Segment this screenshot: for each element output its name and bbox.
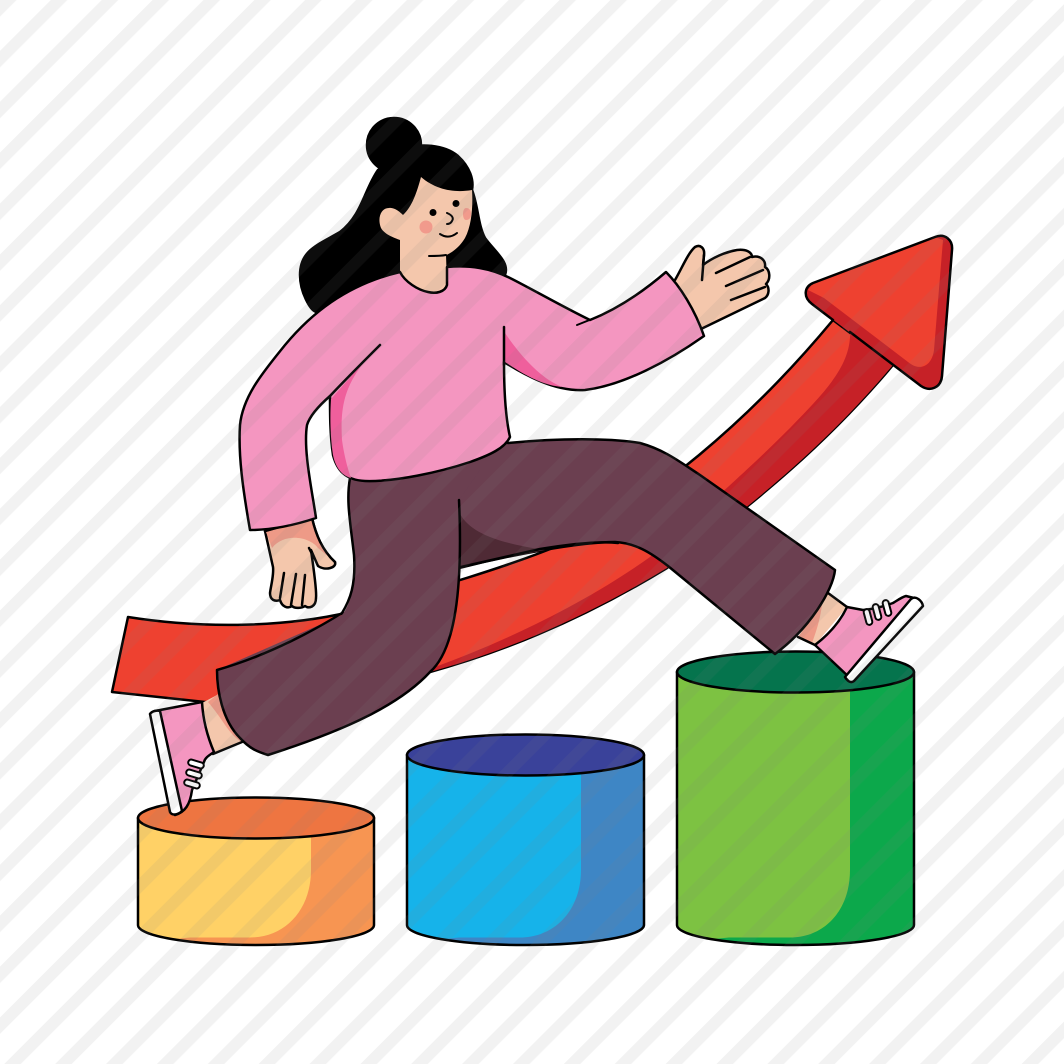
chin line	[429, 255, 446, 256]
right shoe and ankle	[798, 593, 923, 682]
arrow: rising red arrow	[112, 236, 952, 703]
trousers	[217, 439, 835, 755]
back leg	[217, 470, 480, 755]
woman	[150, 118, 923, 815]
sleeve shadows	[330, 357, 368, 478]
front leg	[430, 439, 835, 654]
lower hand	[265, 518, 335, 608]
sweater	[240, 266, 704, 530]
left shoe and ankle	[150, 694, 245, 815]
arrow head	[806, 236, 952, 389]
cylinder: blue bar	[407, 734, 644, 945]
cylinder: green bar	[677, 652, 914, 945]
arrow stem	[112, 320, 893, 703]
hair back and bun	[300, 118, 506, 312]
eyes	[430, 200, 460, 216]
cheeks	[420, 208, 471, 234]
raised hand	[665, 246, 769, 335]
nose and smile	[447, 213, 453, 224]
face and neck	[379, 177, 472, 293]
cylinder: yellow bar	[138, 798, 374, 945]
